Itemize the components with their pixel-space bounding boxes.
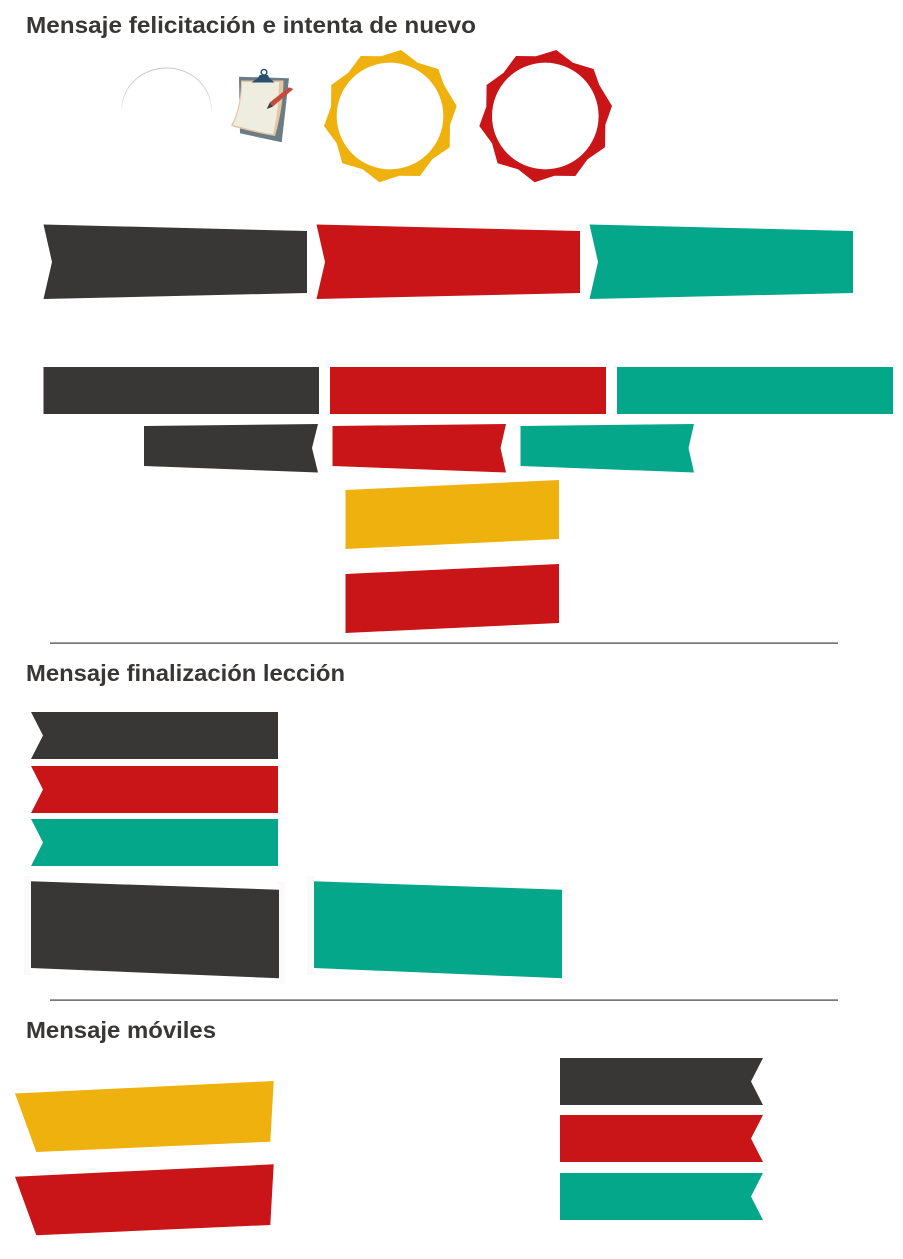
bar: red — [330, 367, 606, 414]
small ribbon: red — [332, 424, 506, 472]
banner: gold — [346, 480, 559, 549]
tag: red — [31, 766, 278, 813]
mobile tag: dark — [560, 1058, 763, 1105]
tag: teal — [31, 819, 278, 866]
badge: red ring — [479, 50, 612, 182]
card: teal — [307, 876, 568, 984]
bar: dark — [44, 367, 319, 414]
mobile banner: red — [15, 1164, 274, 1235]
small ribbon: teal — [520, 424, 694, 472]
mobile tag: teal — [560, 1173, 763, 1220]
heading: felicitación: Mensaje felicitación e intenta de nuevo — [26, 12, 476, 38]
heading: móviles: Mensaje móviles — [26, 1017, 216, 1043]
icon: thin arc — [122, 68, 212, 111]
icon: clipboard with pencil — [231, 70, 293, 142]
ribbon: large dark — [44, 224, 307, 299]
small ribbon: dark — [144, 424, 318, 472]
heading: finalización: Mensaje finalización lección — [26, 660, 345, 686]
banner: red — [346, 564, 559, 633]
badge: gold ring — [324, 50, 457, 182]
ribbon: large red — [316, 224, 580, 299]
mobile banner: gold — [15, 1081, 274, 1152]
mobile tag: red — [560, 1115, 763, 1162]
card: dark — [24, 876, 286, 984]
tag: dark — [31, 712, 278, 759]
bar: teal — [617, 367, 893, 414]
ribbon: large teal — [590, 224, 853, 299]
